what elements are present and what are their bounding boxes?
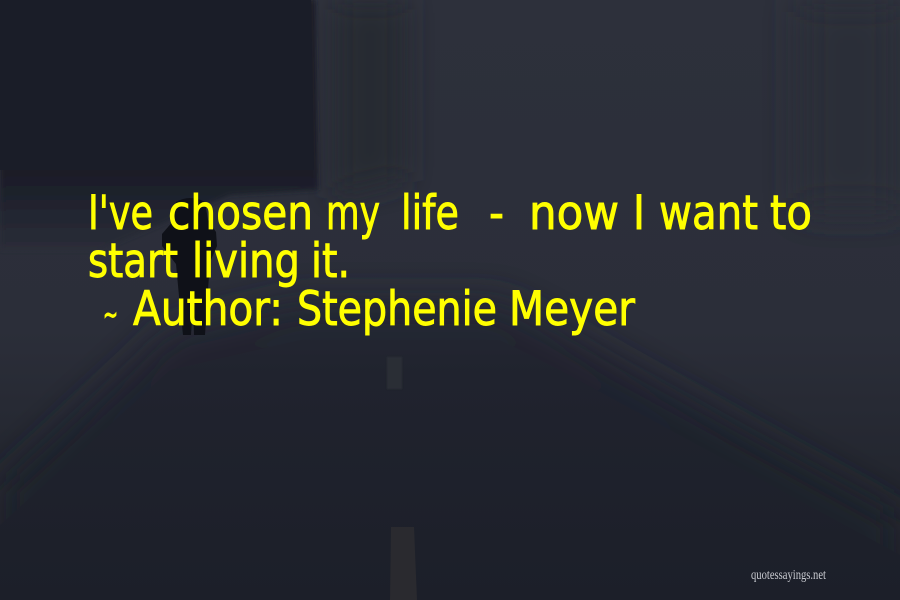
quote text: living xyxy=(192,234,300,289)
quote text: it. xyxy=(311,234,350,289)
quote text: I xyxy=(633,186,645,241)
author attribution: Stephenie xyxy=(297,282,497,337)
quote text xyxy=(88,186,812,289)
road centre markings xyxy=(387,357,417,600)
silhouette of walking figure xyxy=(162,198,217,335)
quote text: - xyxy=(489,186,504,241)
quote text: I've xyxy=(88,186,153,241)
quote text: life xyxy=(401,186,459,241)
author attribution xyxy=(103,282,636,337)
author attribution: ~ xyxy=(103,295,118,333)
quote text: start xyxy=(88,234,178,289)
author attribution: Meyer xyxy=(509,282,636,337)
watermark: quotessayings.net xyxy=(751,568,826,583)
quote text: want xyxy=(659,186,758,241)
author attribution: Author: xyxy=(133,282,283,337)
quote text: my xyxy=(326,186,380,241)
quote text: to xyxy=(770,186,812,241)
quote text: now xyxy=(529,186,619,241)
quote text: chosen xyxy=(168,186,313,241)
